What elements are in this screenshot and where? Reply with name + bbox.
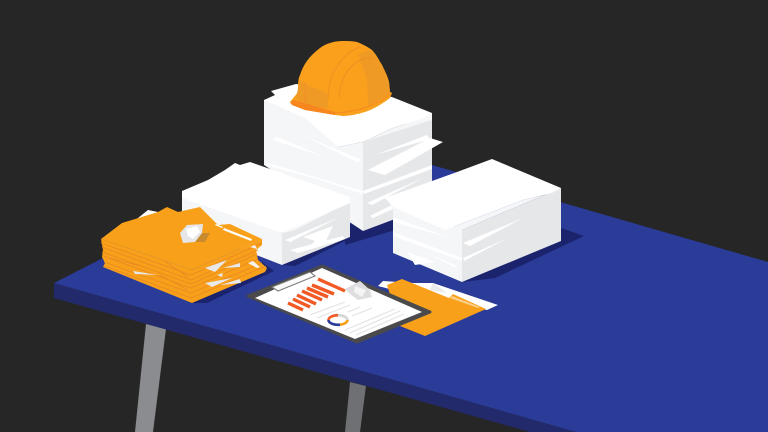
clip: [272, 272, 315, 291]
right desk leg: [345, 382, 366, 432]
donut chart: [328, 315, 348, 325]
large paper stack: [264, 84, 443, 231]
crumpled paper on clipboard: [345, 281, 372, 300]
bar chart: [288, 279, 345, 310]
orange folder stack: [101, 207, 267, 303]
clipboard: [248, 266, 430, 342]
desk top: [54, 138, 768, 432]
shadows on desk: [190, 215, 584, 303]
back folder and sheet: [378, 279, 498, 336]
crumpled paper on folders: [180, 224, 210, 243]
medium paper stack: [182, 162, 350, 265]
right paper stack: [385, 159, 561, 282]
left desk leg: [135, 324, 166, 432]
desk side edge: [54, 283, 576, 432]
text lines: [310, 302, 404, 335]
hard hat: [290, 41, 392, 116]
